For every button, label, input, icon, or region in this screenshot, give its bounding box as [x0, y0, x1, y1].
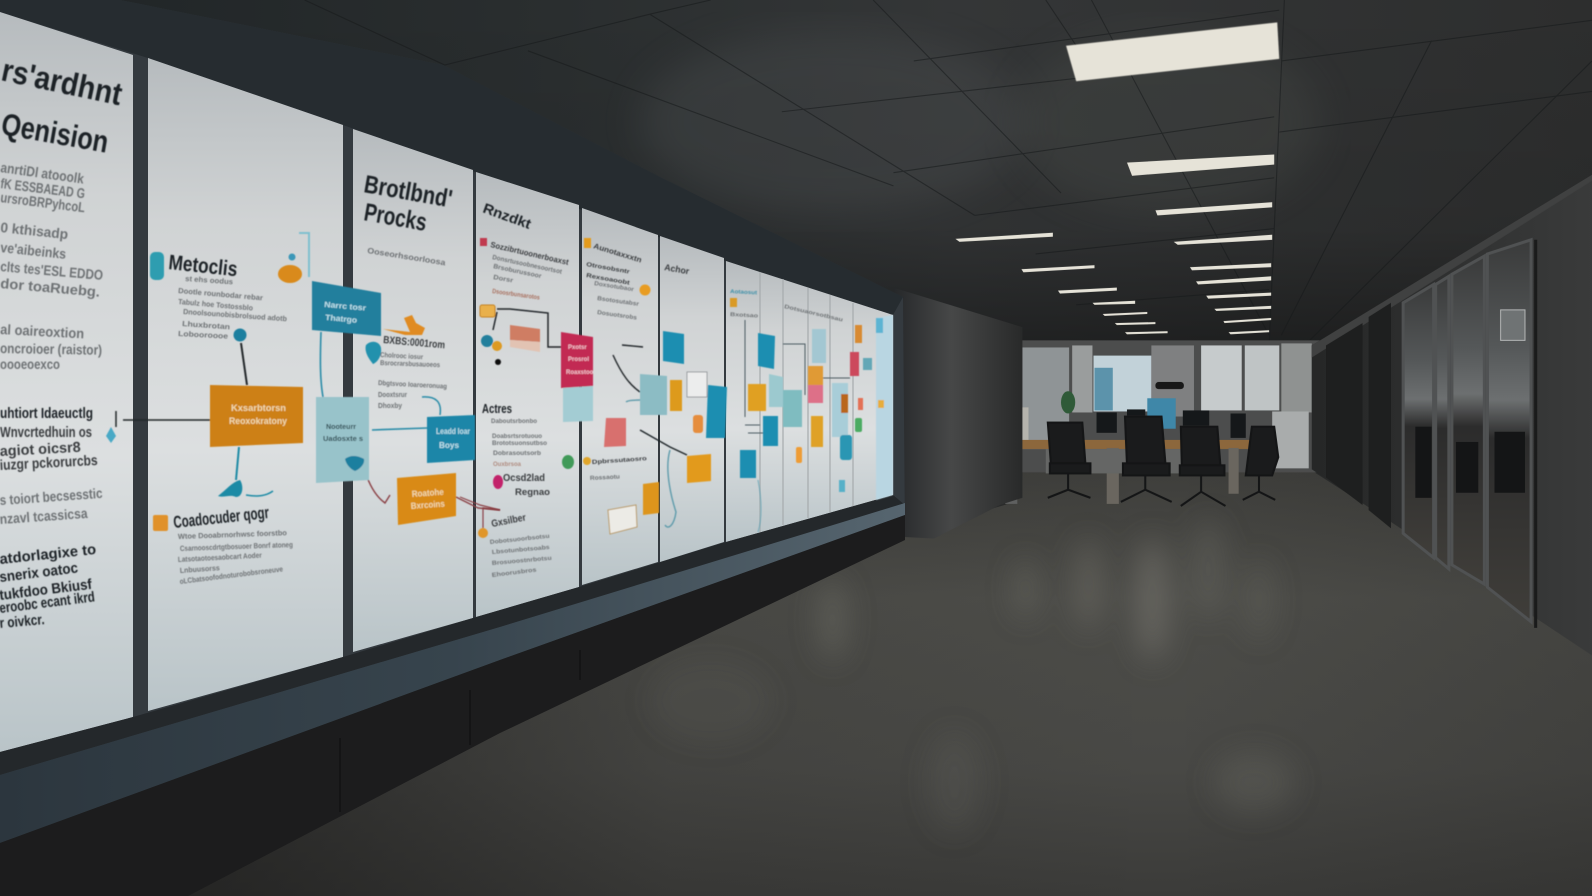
action lines: Brototsuonsutbso	[492, 441, 547, 447]
text block: Bsrocrarsbusauoeos	[380, 360, 440, 369]
lower lines: Dobotsuoorbsotsu	[490, 534, 550, 546]
blue small	[839, 480, 845, 492]
title: rs'ardhnt	[0, 52, 126, 112]
text strip: Rossaotu	[590, 474, 620, 482]
headings far: Bxotsao	[730, 312, 759, 320]
body text	[0, 159, 104, 527]
blue card	[763, 416, 778, 446]
door reflections	[1415, 427, 1525, 498]
icon: orange badge	[584, 238, 591, 248]
text block	[378, 334, 447, 410]
right column	[876, 315, 893, 500]
subheading and dark text: atdorlagixe to	[0, 542, 97, 568]
salmon note	[510, 325, 540, 352]
far panels content	[730, 289, 893, 532]
body text: dor toaRuebg.	[0, 275, 101, 300]
pink small	[858, 398, 863, 410]
panel 3 content	[362, 170, 454, 410]
orange label	[480, 305, 495, 317]
crimson card	[561, 332, 594, 388]
connectors	[116, 332, 500, 510]
light teal box: Nooteurr	[326, 422, 356, 431]
panel 4 content	[460, 200, 594, 579]
lower lines: Brosuoostnrbotsu	[492, 556, 552, 567]
list text: Lhuxbrotan	[182, 319, 231, 331]
icon: orange badge	[153, 515, 168, 531]
left end wall	[893, 287, 1022, 538]
text strip	[590, 456, 647, 482]
teal box: Narrc tosr	[324, 300, 366, 313]
text lines	[490, 240, 570, 302]
lower lines	[490, 534, 552, 579]
gold card	[811, 416, 823, 447]
crimson card: Pxotsr	[568, 345, 587, 351]
ledge	[0, 495, 905, 896]
orange blob	[640, 284, 650, 296]
light teal card	[563, 386, 593, 422]
dark orange	[841, 394, 848, 413]
panel 4	[476, 172, 579, 617]
light blue block	[832, 383, 848, 437]
table	[1003, 440, 1255, 504]
dark wall panels	[1326, 303, 1391, 528]
body text: nzavl tcassicsa	[0, 505, 88, 527]
orange box lower: Roatohe	[411, 487, 444, 499]
lines: Rexsoaoobt	[586, 273, 630, 287]
light blue card	[812, 329, 826, 363]
wall behind the panels	[0, 0, 905, 790]
orange card lower	[643, 482, 659, 515]
white note lower	[608, 505, 637, 534]
text block: Cholrooc iosur	[380, 352, 423, 361]
gold card	[748, 384, 766, 411]
title: Qenision	[0, 106, 111, 160]
icon: red tag	[480, 238, 487, 246]
heading: Rnzdkt	[481, 200, 534, 232]
lines: Bsotosutabsr	[597, 296, 640, 308]
body text: oncroioer (raistor)	[0, 340, 102, 358]
body text: al oaireoxtion	[0, 321, 85, 341]
panel 5	[582, 208, 658, 585]
subheading and dark text: agiot oicsr8	[0, 440, 81, 460]
list text: Lobooroooe	[178, 329, 228, 341]
blue blob	[366, 342, 381, 364]
body text: anrtiDl atooolk	[0, 159, 85, 187]
action lines: Daboutsrbonbo	[491, 419, 537, 425]
subheading and dark text: iuzgr pckorurcbs	[0, 453, 98, 474]
orange blob and bracket	[278, 233, 309, 283]
panel 6	[660, 236, 724, 562]
panel 2 content	[106, 233, 500, 586]
orange box	[210, 385, 303, 447]
orange tab	[693, 415, 703, 433]
heading: actions: Actres	[482, 401, 512, 416]
blue card tall	[706, 385, 727, 438]
upper wall band	[0, 0, 903, 315]
body text: s toiort becsesstic	[0, 485, 103, 508]
list text	[178, 274, 288, 341]
blue card	[663, 331, 684, 364]
panel 2	[148, 58, 343, 711]
red card	[850, 352, 859, 376]
text lines: Dsoosrbunsarotos	[492, 288, 541, 302]
orange marks	[855, 325, 862, 343]
crimson card: Prosrol	[568, 357, 589, 363]
heading: brainstorm process	[362, 170, 454, 237]
monitors	[1097, 409, 1246, 438]
blobs	[481, 335, 502, 365]
orange small	[796, 447, 802, 463]
teal card	[840, 435, 852, 460]
paragraph text: Lnbuusorss	[180, 563, 220, 575]
teal box: Thatrgo	[325, 313, 358, 325]
panel 1 text	[0, 52, 126, 632]
connector	[493, 309, 561, 347]
subheading and dark text	[0, 406, 98, 632]
action lines: Ouxbrsoa	[493, 462, 522, 468]
pink card	[808, 385, 823, 403]
wall shelf	[1155, 382, 1184, 389]
text lines: Brsoburussoor	[493, 263, 542, 280]
orange card	[687, 454, 711, 483]
lines: Dosuotsrobs	[597, 310, 638, 322]
plant	[1061, 391, 1075, 413]
text block: Dhoxby	[378, 403, 402, 410]
body text: fK ESSBAEAD G	[0, 175, 86, 201]
text block: Dbgtsvoo Ioaroeronuag	[378, 380, 447, 391]
text lines: Dorsr	[493, 274, 514, 285]
process wall panels	[0, 12, 893, 752]
lower lines: Lbsotunbotsoabs	[492, 545, 551, 556]
glass doors	[1403, 240, 1531, 622]
action lines	[491, 419, 547, 468]
body text: ursroBRPyhcoL	[0, 189, 86, 215]
subheading and dark text: eroobc ecant ikrd	[0, 589, 96, 617]
ceiling	[0, 0, 1592, 350]
heading: conclusion: Coadocuder qogr	[172, 503, 270, 532]
white note	[687, 372, 707, 397]
heading: brainstorm process: Brotlbnd'	[362, 170, 454, 213]
subheading and dark text: tukfdoo Bkiusf	[0, 577, 93, 604]
heading: brainstorm process: Procks	[362, 198, 429, 237]
headings far: Dotsuaorsotbsau	[784, 304, 843, 323]
blue diamond	[106, 427, 116, 443]
blue cabinet	[1147, 398, 1176, 429]
action lines: Doabsrtsrotuouo	[492, 434, 542, 440]
list text: Dootle rounbodar rebar	[178, 286, 263, 302]
heading: flow: Achor	[664, 262, 690, 276]
text strip: Dpbrssutaosro	[592, 456, 647, 466]
paragraph text: Latsotaotoesaobcart Aoder	[178, 551, 262, 564]
icon: orange boat	[383, 315, 425, 335]
orange box lower: Bxrcoins	[410, 499, 445, 511]
action lines: Dobrasoutsorb	[493, 451, 541, 457]
lines	[586, 262, 640, 322]
connectors	[613, 345, 687, 527]
blue top	[876, 318, 883, 333]
lines: Otrosobsntr	[586, 262, 631, 276]
back room	[1003, 340, 1320, 506]
lines: Doxsotubaor	[594, 281, 635, 293]
body text: oooeoexco	[0, 356, 60, 372]
subheading and dark text: r oivkcr.	[0, 612, 45, 632]
text lines: Sozzibrtuoonerboaxst	[490, 240, 570, 267]
paragraph text: Csarnooscdrtgtbosuoer Bonrf atoneg	[180, 540, 293, 553]
paragraph text: Wtoe Dooabrnorhwsc foorstbo	[178, 528, 287, 541]
lower lines: Ehoorusbros	[492, 567, 538, 579]
sub headings: Gxsilber	[490, 512, 527, 530]
orange dot	[583, 457, 591, 465]
heading: methods: Metoclis	[167, 251, 239, 281]
windows	[1022, 343, 1312, 449]
floor reflections	[650, 518, 1295, 833]
gold small	[878, 400, 884, 408]
panel 3	[353, 129, 473, 652]
list text: st ehs oodus	[185, 274, 233, 286]
text block: BXBS:0001rom	[383, 334, 446, 351]
orange box: Kxsarbtorsn	[231, 403, 286, 413]
white cabinet	[1272, 411, 1309, 468]
sub headings: Ocsd2lad	[503, 473, 545, 484]
orange card	[808, 366, 823, 385]
teal box lower	[427, 415, 475, 463]
paragraph text	[178, 528, 293, 586]
body text: clts tes'ESL EDDO	[0, 258, 104, 283]
gold card	[670, 380, 682, 411]
title	[0, 52, 126, 160]
teal card	[640, 374, 667, 415]
panel 1	[0, 12, 133, 752]
teal card	[783, 390, 802, 427]
body text: 0 kthisadp	[0, 219, 69, 242]
teal box	[312, 281, 381, 336]
subheading and dark text: snerix oatoc	[0, 560, 79, 586]
lamp	[1008, 407, 1028, 448]
light teal card	[769, 374, 783, 407]
paragraph text: oLCbatsoofodnoturobobsroneuve	[179, 564, 283, 586]
teal box lower: Boys	[439, 441, 460, 450]
subheading and dark text: uhtiort Idaeuctlg	[0, 406, 93, 422]
right wall	[1312, 175, 1592, 655]
blue card	[758, 333, 775, 369]
blue card	[740, 450, 756, 478]
teal small	[863, 358, 872, 370]
list text: Dnoolsounobisbrolsuod adotb	[183, 307, 288, 323]
panel 7	[726, 261, 893, 542]
headings far	[730, 289, 843, 323]
green card	[855, 418, 862, 432]
panel 5 content	[583, 238, 727, 534]
blobs lower	[478, 455, 574, 538]
list text: Tabulz hoe Tostossblo	[178, 297, 254, 313]
light teal box: Uadosxte s	[323, 434, 363, 443]
salmon card	[604, 418, 626, 447]
chairs	[1048, 417, 1278, 506]
blue blob	[218, 480, 242, 497]
icon: teal badge	[150, 252, 164, 280]
blue splotch	[234, 328, 246, 342]
sub headings: Regnao	[515, 487, 551, 497]
teal box lower: Leadd loar	[436, 427, 470, 436]
text block: Dooxtsrur	[378, 392, 407, 399]
orange box lower	[397, 473, 456, 525]
thin connectors	[745, 320, 850, 532]
floor	[173, 469, 1592, 896]
sub headings	[490, 473, 551, 530]
light teal box	[316, 397, 369, 483]
gold tag	[730, 298, 737, 307]
crimson card: Roaxstoo	[566, 370, 594, 376]
panel dividers far end	[760, 272, 853, 532]
body text: ve'aibeinks	[0, 239, 67, 262]
lights	[955, 22, 1279, 334]
red line	[460, 497, 500, 528]
headings far: Aotaosut	[730, 289, 757, 296]
subheading and dark text: Wnvcrtedhuin os	[0, 425, 92, 441]
orange box: Reoxokratony	[229, 416, 287, 426]
heading: Aunotaxxxtn	[592, 241, 643, 265]
text lines: Donsrtusoobnesoortsot	[492, 254, 563, 276]
sub text: Ooseorhsoorloosa	[367, 246, 447, 267]
